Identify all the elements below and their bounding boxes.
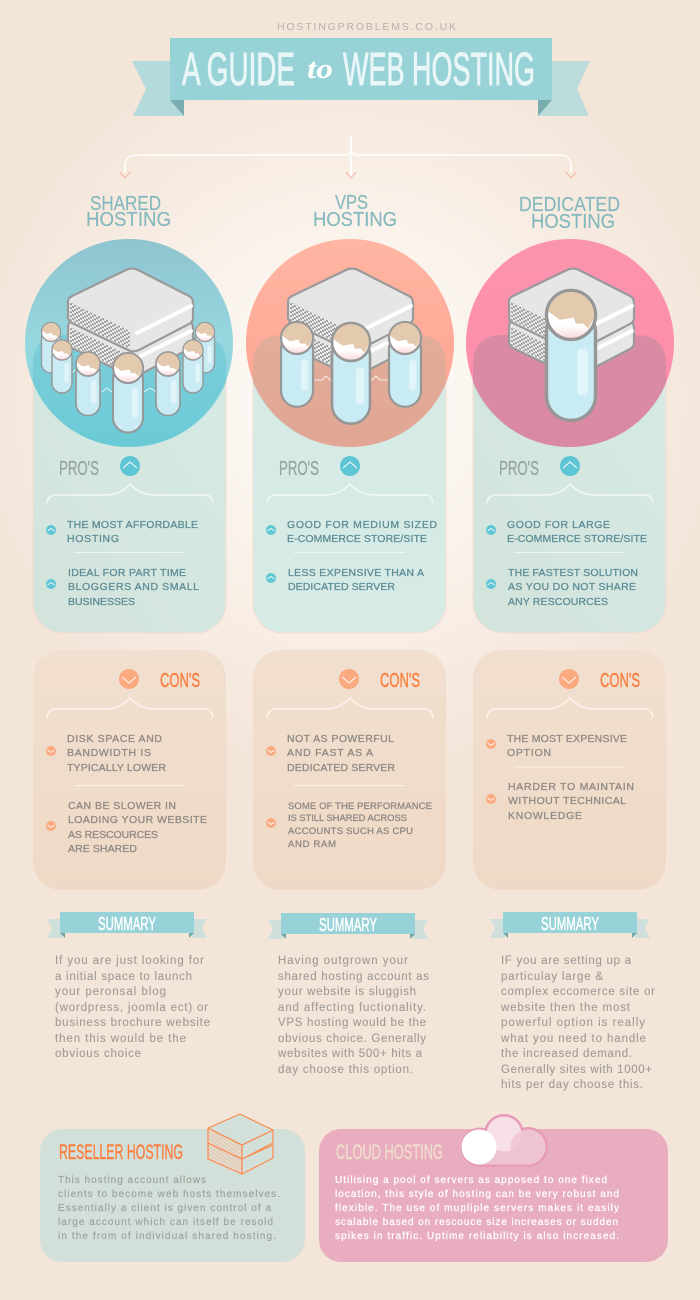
con item: not as powerful: NOT AS POWERFUL [287,733,394,745]
heading: vps hosting [313,192,397,231]
panel: vps cons [253,650,446,890]
summary text: vps: day choose this option. [278,1064,413,1076]
title banner [132,38,590,116]
pro item: bloggers: BLOGGERS AND SMALL [68,581,199,593]
pro item: affordable: THE MOST AFFORDABLE [67,519,198,531]
pro item: medium sites: E-COMMERCE STORE/SITE [287,533,427,545]
con item: disk space [46,733,166,774]
summary text: shared: (wordpress, joomla ect) or [55,1002,208,1014]
pro item: bloggers: IDEAL FOR PART TIME [68,567,186,579]
con item: slower: AS RESCOURCES [68,829,158,841]
summary text: vps: shared hosting account as [278,971,429,983]
summary text: shared: business brochure website [55,1017,210,1029]
heading: vps hosting: VPS [335,192,368,214]
con item: most expensive [486,733,627,759]
summary text: dedicated [500,955,655,1091]
con item: shared performance: SOME OF THE PERFORMANCE [288,801,432,812]
panel: cloud hosting [319,1114,668,1262]
heading: dedicated hosting: DEDICATED [519,194,620,216]
pro item: fastest: AS YOU DO NOT SHARE [508,581,636,593]
heading: shared hosting: SHARED [90,193,161,215]
con item: shared performance: ACCOUNTS SUCH AS CPU [288,826,413,837]
panel: shared cons [33,650,226,890]
con item: disk space: DISK SPACE AND [67,733,162,745]
pro item: less expensive [266,567,424,593]
pro item: less expensive: LESS EXPENSIVE THAN A [288,567,424,579]
pro item: affordable [46,519,198,545]
description: Utilising a pool of servers as apposed to one fixed [335,1175,607,1186]
icon: down chevron [119,669,139,689]
con item: slower: LOADING YOUR WEBSITE [68,814,207,826]
pro item: large sites: GOOD FOR LARGE [507,519,610,531]
summary text: shared [55,955,210,1060]
heading: vps hosting: HOSTING [313,209,397,231]
con item: harder to maintain: WITHOUT TECHNICAL [508,795,626,807]
brace [47,484,213,503]
label: cons: CON'S [600,670,640,692]
pro item: bloggers [46,567,199,608]
label: pros: PRO'S [279,458,319,480]
circle illustration: shared hosting [25,239,233,447]
summary text: dedicated: the increased demand. [501,1048,632,1060]
summary text: vps: and affecting fuctionality. [278,1002,426,1014]
summary ribbon: shared: SUMMARY [98,914,156,934]
title banner: WEB HOSTING [343,43,535,95]
icon: down chevron [559,669,579,689]
summary text: vps: websites with 500+ hits a [277,1048,423,1060]
panel: shared pros [33,335,226,633]
title: RESELLER HOSTING [59,1141,183,1164]
icon: server outline [208,1114,273,1174]
icon: cloud [460,1114,548,1167]
pro item: affordable: HOSTING [67,533,119,545]
summary text: dedicated: particulay large & [501,971,603,983]
heading: dedicated hosting: HOSTING [531,211,615,233]
title: CLOUD HOSTING [336,1141,443,1164]
label: pros: PRO'S [499,458,539,480]
description: scalable based on rescouce size increases or sudden [335,1217,618,1228]
panel: reseller hosting [40,1114,305,1262]
description: flexible. The use of mupliple servers makes it easily [335,1203,619,1214]
brace [267,484,433,503]
summary ribbon: shared [47,912,207,938]
panel: dedicated cons [473,650,666,890]
brace [487,698,653,718]
con item: harder to maintain [486,781,634,822]
con item: disk space: TYPICALLY LOWER [67,762,166,774]
label: cons: CON'S [380,670,420,692]
circle illustration: dedicated hosting [466,239,674,447]
icon: down chevron [339,669,359,689]
icon: up chevron [120,456,140,476]
title banner: A GUIDE [182,43,295,95]
description: location, this style of hosting can be very robust and [335,1189,619,1200]
summary text: dedicated: Generally sites with 1000+ [501,1064,652,1076]
site name: HOSTINGPROBLEMS.CO.UK [277,21,456,33]
con item: most expensive: OPTION [507,747,551,759]
summary text: shared: obvious choice [55,1048,141,1060]
summary text: vps: your website is sluggish [278,986,416,998]
con item: slower: ARE SHARED [68,843,137,855]
pro item: fastest: ANY RESCOURCES [508,596,608,608]
con item: shared performance: AND RAM [288,839,336,850]
summary text: dedicated: complex eccomerce site or [501,986,655,998]
con item: most expensive: THE MOST EXPENSIVE [507,733,627,745]
con item: not as powerful [266,733,395,774]
description: Essentially a client is given control of a [58,1203,271,1214]
heading: shared hosting: HOSTING [86,209,171,231]
summary ribbon: dedicated: SUMMARY [541,914,599,934]
summary text: vps: Having outgrown your [278,955,408,967]
description [58,1175,280,1242]
summary text: vps: obvious choice. Generally [278,1033,426,1045]
panel: dedicated pros [473,335,666,633]
icon: up chevron [340,456,360,476]
con item: slower: CAN BE SLOWER IN [68,800,176,812]
description [335,1175,619,1242]
brace [487,484,653,503]
summary text: shared: a initial space to launch [55,971,192,983]
summary text: dedicated: hits per day choose this. [501,1079,643,1091]
title banner: to [307,54,333,85]
pro item: large sites [486,519,647,545]
summary text: shared: your peronsal blog [55,986,166,998]
panel: vps pros [253,335,446,633]
heading: shared hosting [86,193,171,231]
description: spikes in traffic. Uptime reliability is also increased. [335,1231,619,1242]
pro item: bloggers: BUSINESSES [68,596,135,608]
summary text: shared: If you are just looking for [55,955,204,967]
pro item: fastest [486,567,638,608]
heading: dedicated hosting [519,194,620,233]
pro item: medium sites: GOOD FOR MEDIUM SIZED [287,519,437,531]
icon: up chevron [560,456,580,476]
label: pros: PRO'S [59,458,99,480]
summary text: shared: then this would be the [55,1033,186,1045]
summary text: dedicated: IF you are setting up a [501,955,632,967]
summary ribbon: vps: SUMMARY [319,915,377,935]
brace [267,698,433,718]
summary text: vps [277,955,429,1076]
con item: shared performance: IS STILL SHARED ACROSS [288,813,407,824]
label: cons: CON'S [160,670,200,692]
con item: not as powerful: DEDICATED SERVER [287,762,395,774]
summary text: dedicated: what you need to handle [500,1033,646,1045]
summary text: dedicated: website then the most [500,1002,631,1014]
con item: harder to maintain: KNOWLEDGE [508,810,582,822]
con item: not as powerful: AND FAST AS A [287,747,373,759]
brace [47,698,213,718]
con item: slower [46,800,207,855]
description: large account which can itself be resold [58,1217,273,1228]
description: This hosting account allows [58,1175,206,1186]
con item: harder to maintain: HARDER TO MAINTAIN [508,781,634,793]
con item: shared performance [266,801,432,850]
description: in the from of individual shared hosting. [58,1231,276,1242]
pro item: fastest: THE FASTEST SOLUTION [508,567,638,579]
summary text: vps: VPS hosting would be the [278,1017,426,1029]
pro item: medium sites [266,519,437,545]
connector arrows [120,136,576,178]
pro item: less expensive: DEDICATED SERVER [288,581,395,593]
summary ribbon: dedicated [490,912,650,938]
description: clients to become web hosts themselves. [58,1189,280,1200]
circle illustration: vps hosting [246,239,454,447]
summary ribbon: vps [268,913,428,939]
con item: disk space: BANDWIDTH IS [67,747,151,759]
pro item: large sites: E-COMMERCE STORE/SITE [507,533,647,545]
summary text: dedicated: powerful option is really [501,1017,645,1029]
